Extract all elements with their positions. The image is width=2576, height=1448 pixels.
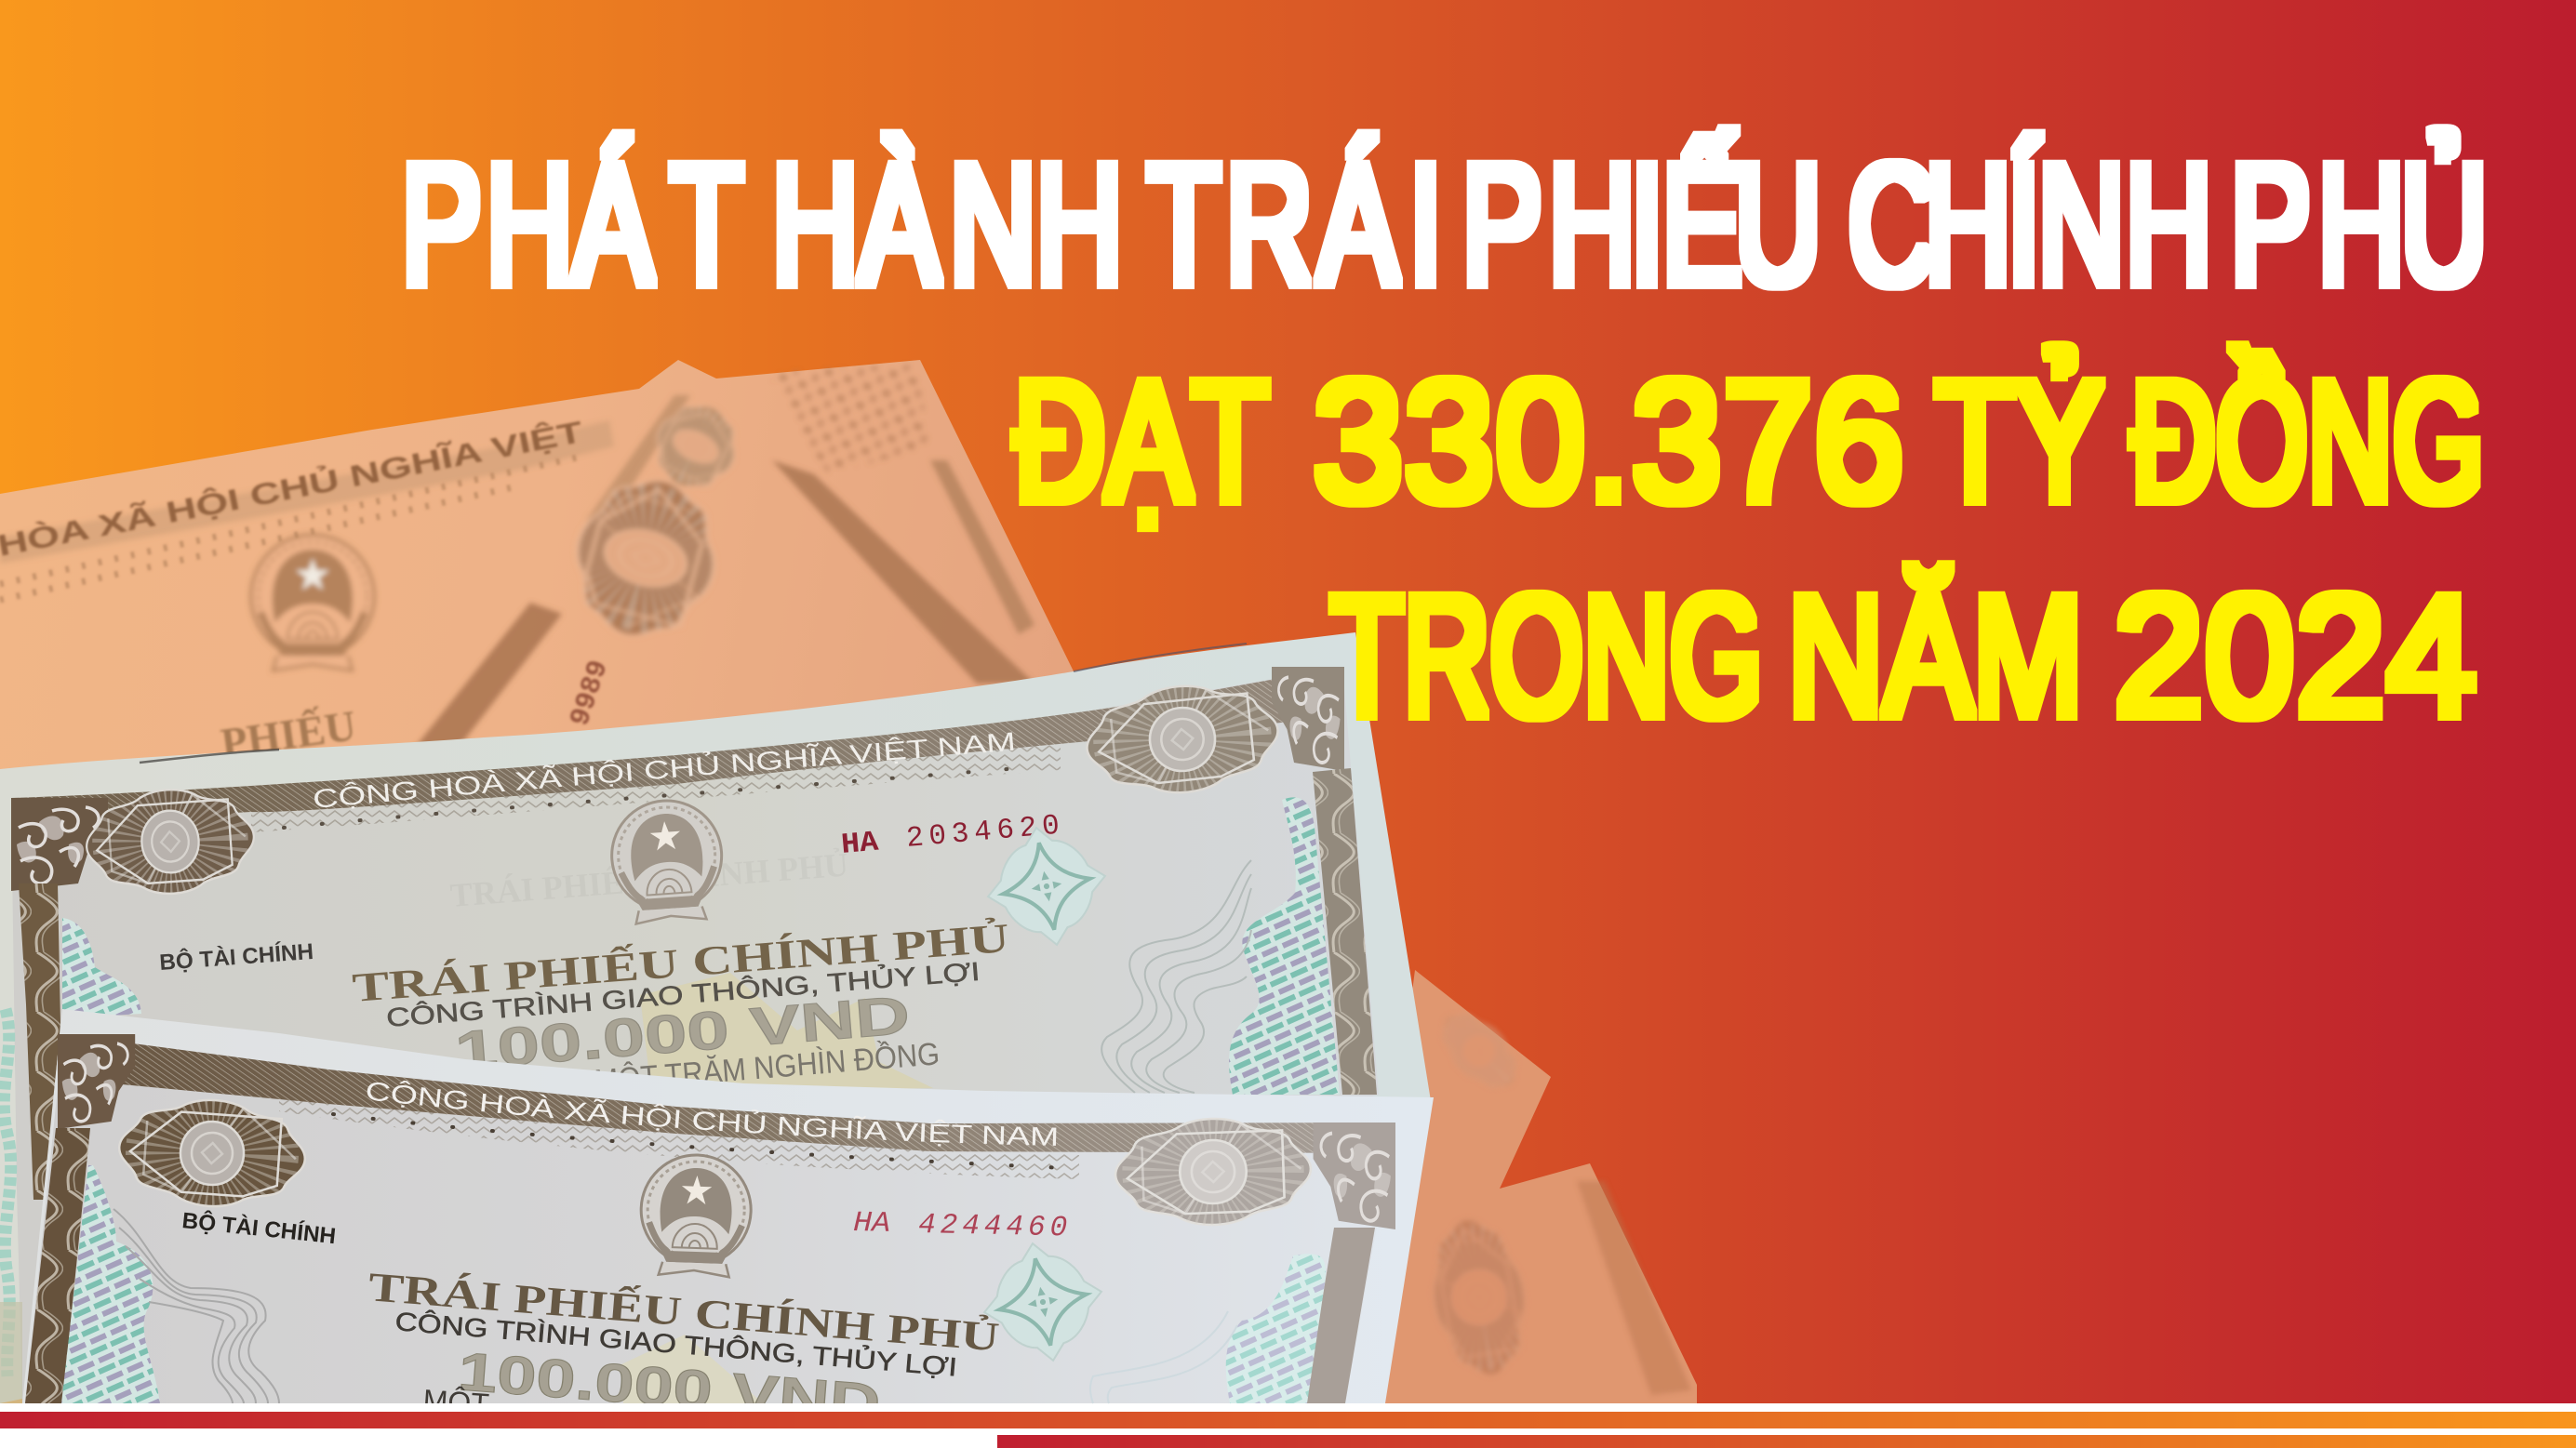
title line 1: white: PHÁT HÀNH TRÁI PHIẾU CHÍNH PHỦ	[401, 127, 2488, 320]
serial number: 4244460	[918, 1209, 1067, 1244]
title line 2: yellow amount: ĐẠT	[1014, 346, 1269, 538]
emblem	[639, 1153, 753, 1278]
text: value in words: MỘT TRĂM NGHÌN ĐỒNG	[594, 1036, 941, 1099]
title line 2: yellow amount: TỶ	[1935, 346, 2104, 538]
serial number	[853, 1207, 1067, 1244]
bottom gradient stripe	[0, 1412, 2576, 1428]
text: face value: 100.000 VND	[453, 985, 912, 1082]
middle bond	[0, 632, 1431, 1403]
guilloche left and right	[62, 797, 1340, 1095]
bottom right gradient bar	[997, 1435, 2576, 1448]
back bond, peach tinted: 9989	[565, 657, 616, 730]
title line 2: yellow amount: 330.376	[1313, 346, 1904, 538]
title line 3: yellow year: 2024	[2114, 561, 2476, 752]
text: bond title: TRÁI PHIẾU CHÍNH PHỦ	[351, 914, 1011, 1011]
corner ornaments and seals	[11, 798, 108, 891]
back bond, peach tinted	[0, 360, 1074, 769]
map watermark	[621, 1335, 763, 1403]
map watermark and faint reverse text	[640, 973, 933, 1093]
clip region below bond for bottom-cropped text	[367, 1263, 1001, 1434]
emblem	[608, 797, 726, 925]
serial number: HA	[840, 827, 880, 862]
back bond, peach tinted: PHIẾU	[218, 700, 359, 767]
top border band	[123, 1043, 1314, 1179]
text: issuer: BỘ TÀI CHÍNH	[180, 1207, 337, 1249]
title	[401, 127, 2488, 752]
title line 3: yellow year: TRONG	[1330, 561, 1763, 752]
guilloche left and right	[61, 1165, 1326, 1403]
top border band: CỘNG HOÀ XÃ HỘI CHỦ NGHĨA VIỆT NAM	[367, 1081, 1057, 1146]
middle bond: TRÁI PHIẾU CHÍNH PHỦ	[448, 845, 849, 914]
serial number: 2034620	[905, 810, 1061, 856]
front bond	[22, 1009, 1434, 1434]
serial number	[840, 810, 1061, 862]
title line 2: yellow amount	[1014, 346, 2484, 538]
clip region below bond for bottom-cropped text: 100.000 VND	[456, 1341, 883, 1434]
clip region below bond for bottom-cropped text: MỘT	[422, 1383, 490, 1421]
top border band	[12, 679, 1284, 832]
corner ornaments and seals	[58, 1034, 135, 1129]
side wave borders	[19, 768, 1377, 1200]
diamond ornament	[978, 817, 1115, 955]
top border band: CỘNG HOÀ XÃ HỘI CHỦ NGHĨA VIỆT NAM	[314, 733, 1014, 809]
serial number: HA	[853, 1207, 891, 1241]
diamond ornament	[974, 1233, 1112, 1371]
printed field	[11, 667, 1379, 1403]
text: bond subtitle: CÔNG TRÌNH GIAO THÔNG, THỦY LỢI	[385, 956, 981, 1032]
printed field	[25, 1034, 1395, 1403]
back bond, peach tinted: HÒA XÃ HỘI CHỦ NGHĨA VIỆT	[0, 420, 581, 556]
title line 3: yellow year: NĂM	[1788, 561, 2084, 752]
back bond lower right fragment	[1358, 970, 1697, 1403]
text: issuer: BỘ TÀI CHÍNH	[158, 938, 314, 976]
title line 3: yellow year	[1330, 561, 2476, 752]
clip region below bond for bottom-cropped text: CÔNG TRÌNH GIAO THÔNG, THỦY LỢI	[394, 1306, 958, 1382]
clip region below bond for bottom-cropped text: TRÁI PHIẾU CHÍNH PHỦ	[367, 1263, 1001, 1361]
left margin guilloche strip	[4, 1009, 11, 1376]
illustration: stack of government bonds	[0, 360, 1697, 1434]
side wave borders	[25, 1128, 1375, 1403]
